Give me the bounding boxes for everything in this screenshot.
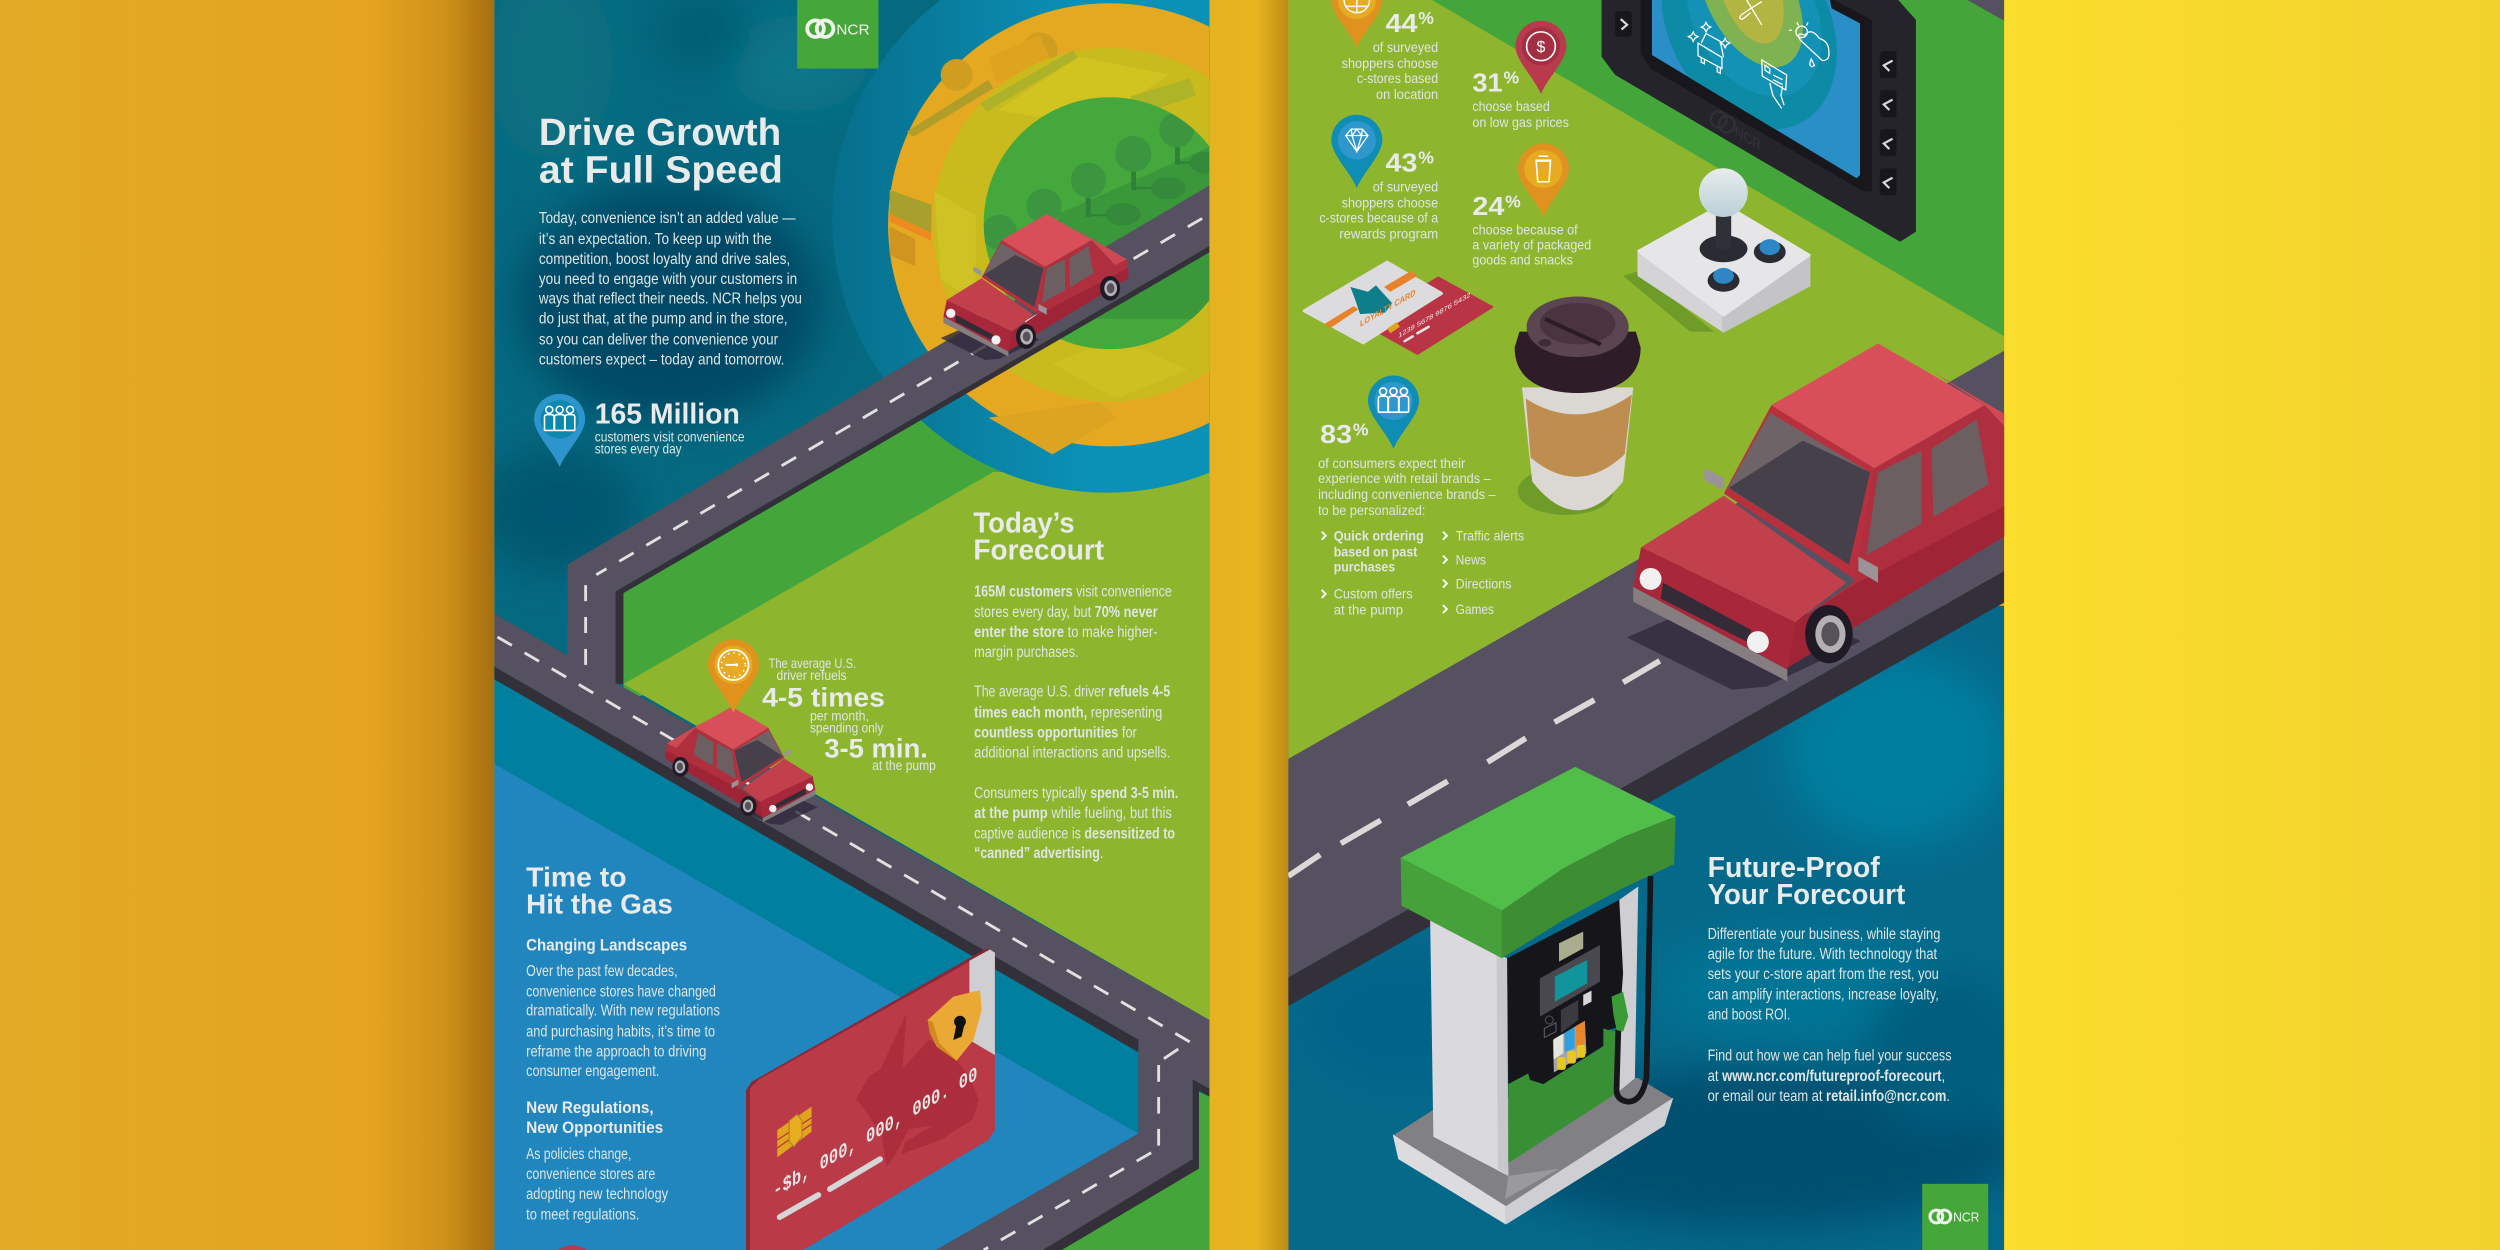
block: new regulations: As policies change, <box>526 1146 631 1163</box>
pump black panel <box>1507 900 1623 1084</box>
stat: 43 percent: % <box>1418 147 1434 167</box>
block: changing landscapes: consumer engagement. <box>526 1063 659 1080</box>
pump green lower <box>1508 1028 1617 1163</box>
stat: 31 percent: on low gas prices <box>1472 114 1569 130</box>
intro paragraph: so you can deliver the convenience your <box>539 331 778 348</box>
monitor brand: NCR <box>1735 123 1761 155</box>
mid green ground <box>623 420 1210 696</box>
stat: refuels: 4-5 times <box>762 681 885 712</box>
car: middle <box>666 707 818 825</box>
teal strip under road <box>494 666 1138 1134</box>
personalization list: News <box>1456 551 1486 567</box>
stat: 31 percent <box>1472 21 1569 130</box>
credit card <box>746 948 995 1250</box>
heading: today's forecourt: Today’s <box>973 508 1075 540</box>
pump left pillar <box>1430 920 1508 1176</box>
heading: time to hit the gas: Hit the Gas <box>526 889 673 920</box>
car: top <box>941 214 1128 360</box>
stat: 43 percent <box>1319 115 1438 241</box>
heading: today's forecourt <box>973 508 1105 567</box>
stat: 83 percent: experience with retail brands – <box>1318 470 1491 486</box>
main road <box>1288 351 2004 1006</box>
logo: NCR top: NCR <box>836 21 870 38</box>
block: changing landscapes <box>526 935 720 1080</box>
title: at Full Speed <box>539 149 783 192</box>
intro paragraph: you need to engage with your customers in <box>539 271 797 288</box>
future-proof text: can amplify interactions, increase loyalty, <box>1708 987 1939 1004</box>
concentric circles <box>832 0 1210 493</box>
personalization list: Quick ordering <box>1334 527 1424 543</box>
future-proof text <box>1708 926 1952 1105</box>
block: new regulations: convenience stores are <box>526 1166 655 1183</box>
lime ground <box>623 472 1210 1020</box>
heading: future-proof: Future-Proof <box>1708 852 1880 884</box>
pump nozzle <box>1612 992 1628 1032</box>
personalization list: purchases <box>1334 559 1395 575</box>
forecourt text: stores every day, but 70% never <box>974 604 1158 621</box>
title <box>539 111 783 192</box>
personalization list: Directions <box>1456 575 1511 591</box>
pump base <box>1393 1078 1673 1224</box>
logo: NCR bottom <box>1922 1184 1988 1250</box>
cards: loyalty and credit: LOYALTY CARD <box>1360 287 1415 329</box>
block: new regulations: New Regulations, <box>526 1098 654 1117</box>
stat: 24 percent: a variety of packaged <box>1472 237 1591 253</box>
future-proof text: Find out how we can help fuel your success <box>1708 1047 1952 1064</box>
stat: 24 percent: goods and snacks <box>1472 252 1573 268</box>
block: new regulations: adopting new technology <box>526 1186 668 1203</box>
block: changing landscapes: and purchasing habits, it’s time to <box>526 1023 715 1040</box>
forecourt text: captive audience is desensitized to <box>974 826 1175 843</box>
stat: 83 percent: including convenience brands – <box>1318 486 1496 502</box>
forecourt text: “canned” advertising. <box>974 845 1103 862</box>
future-proof text: at www.ncr.com/futureproof-forecourt, <box>1708 1068 1945 1085</box>
pump canopy <box>1401 767 1676 958</box>
forecourt text: enter the store to make higher- <box>974 624 1158 641</box>
block: changing landscapes: dramatically. With new regulations <box>526 1003 720 1020</box>
panel background blurred teal <box>478 0 1210 1250</box>
heading: future-proof: Your Forecourt <box>1708 879 1906 911</box>
personalization list: based on past <box>1334 543 1418 559</box>
joystick <box>1623 168 1809 332</box>
stat: 43 percent: c-stores because of a <box>1319 209 1438 225</box>
shield <box>928 990 982 1061</box>
stat: 83 percent: of consumers expect their <box>1318 455 1466 471</box>
monitor brand <box>1711 112 1761 155</box>
car: large <box>1627 344 2072 690</box>
personalization list <box>1322 527 1524 618</box>
trees <box>982 112 1224 319</box>
personalization list: Traffic alerts <box>1456 527 1524 543</box>
pump hose <box>1617 876 1651 1102</box>
rabbit watermark <box>856 1013 979 1167</box>
stat: 43 percent: shoppers choose <box>1342 194 1438 210</box>
stat: refuels: The average U.S. <box>768 655 856 671</box>
screen <box>1626 0 1872 178</box>
heading: future-proof <box>1708 852 1906 911</box>
top green ground <box>1432 0 2004 336</box>
faded scene in gold ring <box>890 32 1072 454</box>
stat: 24 percent: % <box>1505 191 1521 211</box>
block: new regulations <box>526 1098 668 1224</box>
heading: time to hit the gas <box>526 861 673 920</box>
forecourt text: at the pump while fueling, but this <box>974 805 1172 822</box>
chip <box>777 1107 812 1157</box>
stat: 44 percent: 44 <box>1386 10 1418 38</box>
block: new regulations: to meet regulations. <box>526 1207 639 1224</box>
personalization list: Games <box>1456 601 1494 617</box>
stat: 44 percent: c-stores based <box>1357 70 1438 86</box>
stat: 31 percent: choose based <box>1472 98 1550 114</box>
forecourt text: 165M customers visit convenience <box>974 583 1172 600</box>
intro paragraph: do just that, at the pump and in the store, <box>539 311 788 328</box>
panel: right poster <box>1288 0 2072 1250</box>
stat: 83 percent: 83 <box>1320 421 1352 449</box>
forecourt text: The average U.S. driver refuels 4-5 <box>974 684 1171 701</box>
road 2 and lower bend <box>494 614 1210 1250</box>
stat: 43 percent: rewards program <box>1339 225 1438 241</box>
faded scene in yellow ring <box>934 50 1196 280</box>
intro paragraph: it’s an expectation. To keep up with the <box>539 231 772 248</box>
stat: 31 percent: $ <box>1537 39 1546 56</box>
stat: 24 percent <box>1472 143 1591 268</box>
stat: 83 percent: % <box>1353 419 1369 439</box>
stat: refuels: at the pump <box>872 757 936 773</box>
road corner top right <box>1967 0 2004 21</box>
title: Drive Growth <box>539 111 781 154</box>
forecourt text: countless opportunities for <box>974 724 1137 741</box>
dark green corner <box>1062 1092 1210 1250</box>
card number: -$b, 000, 000, 000. 00 <box>773 1063 977 1204</box>
future-proof text: or email our team at retail.info@ncr.com. <box>1708 1088 1950 1105</box>
logo: NCR top <box>797 0 879 69</box>
block: changing landscapes: Changing Landscapes <box>526 935 687 954</box>
block: changing landscapes: reframe the approach to driving <box>526 1043 706 1060</box>
lime ground <box>1288 0 2004 762</box>
gas pump <box>1393 767 1676 1224</box>
stat: refuels: 3-5 min. <box>824 732 928 763</box>
forecourt text: times each month, representing <box>974 704 1162 721</box>
panel background blurred teal <box>1288 606 2025 1250</box>
stat: refuels: spending only <box>810 720 883 736</box>
stat: refuels: driver refuels <box>776 667 847 683</box>
stat: 24 percent: choose because of <box>1472 221 1578 237</box>
cards: loyalty and credit <box>1304 262 1492 354</box>
forecourt text: additional interactions and upsells. <box>974 744 1170 761</box>
stat: 44 percent: % <box>1418 8 1434 28</box>
stat: 83 percent: to be personalized: <box>1318 502 1425 518</box>
future-proof text: Differentiate your business, while staying <box>1708 926 1940 943</box>
future-proof text: sets your c-store apart from the rest, you <box>1708 966 1939 983</box>
screen side buttons <box>1615 11 1897 195</box>
stat: 165 million: 165 Million <box>595 398 740 430</box>
stat: 31 percent: 31 <box>1472 70 1503 98</box>
cards: loyalty and credit: 1239 5678 9876 5432 <box>1398 291 1471 340</box>
road 1 <box>568 185 1210 702</box>
logo: NCR bottom: NCR <box>1953 1209 1979 1224</box>
pump screen and controls <box>1540 932 1600 1073</box>
stat: 165 million: stores every day <box>595 441 682 457</box>
forecourt text <box>974 583 1178 862</box>
intro paragraph: competition, boost loyalty and drive sales, <box>539 251 790 268</box>
red pin at bottom <box>558 1245 587 1250</box>
forecourt text: Consumers typically spend 3-5 min. <box>974 785 1178 802</box>
heading: today's forecourt: Forecourt <box>973 535 1105 567</box>
stat: 44 percent: of surveyed <box>1373 39 1438 55</box>
stat: 31 percent: % <box>1504 68 1520 88</box>
forecourt text: margin purchases. <box>974 644 1079 661</box>
stat: refuels: per month, <box>810 708 869 724</box>
stat: 24 percent: 24 <box>1472 193 1505 221</box>
heading: time to hit the gas: Time to <box>526 861 627 892</box>
intro paragraph <box>538 210 802 368</box>
block: changing landscapes: Over the past few decades, <box>526 963 678 980</box>
stat: 165 million: customers visit convenience <box>595 429 745 445</box>
block: new regulations: New Opportunities <box>526 1118 663 1137</box>
intro paragraph: Today, convenience isn’t an added value — <box>539 210 796 227</box>
intro paragraph: customers expect – today and tomorrow. <box>539 351 784 368</box>
stat: 83 percent <box>1318 375 1496 518</box>
panel: left poster <box>494 0 1210 1250</box>
monitor <box>1602 0 1916 242</box>
stat: 44 percent: shoppers choose <box>1342 55 1438 71</box>
future-proof text: and boost ROI. <box>1708 1007 1790 1024</box>
coffee cup <box>1515 297 1641 515</box>
future-proof text: agile for the future. With technology that <box>1708 946 1938 963</box>
stat: 43 percent: of surveyed <box>1373 178 1438 194</box>
stat: 44 percent: on location <box>1376 86 1438 102</box>
intro paragraph: ways that reflect their needs. NCR helps you <box>538 291 802 308</box>
screen icons <box>1688 0 1829 108</box>
personalization list: Custom offers <box>1334 586 1413 602</box>
stat: 165 million <box>534 394 745 467</box>
stat: 43 percent: 43 <box>1386 149 1417 177</box>
block: changing landscapes: convenience stores have changed <box>526 983 716 1000</box>
pump right pillar <box>1617 886 1638 1093</box>
blue ground <box>494 764 1138 1250</box>
personalization list: at the pump <box>1334 602 1403 618</box>
stat: refuels <box>708 639 936 773</box>
stat: 44 percent <box>1331 0 1438 102</box>
